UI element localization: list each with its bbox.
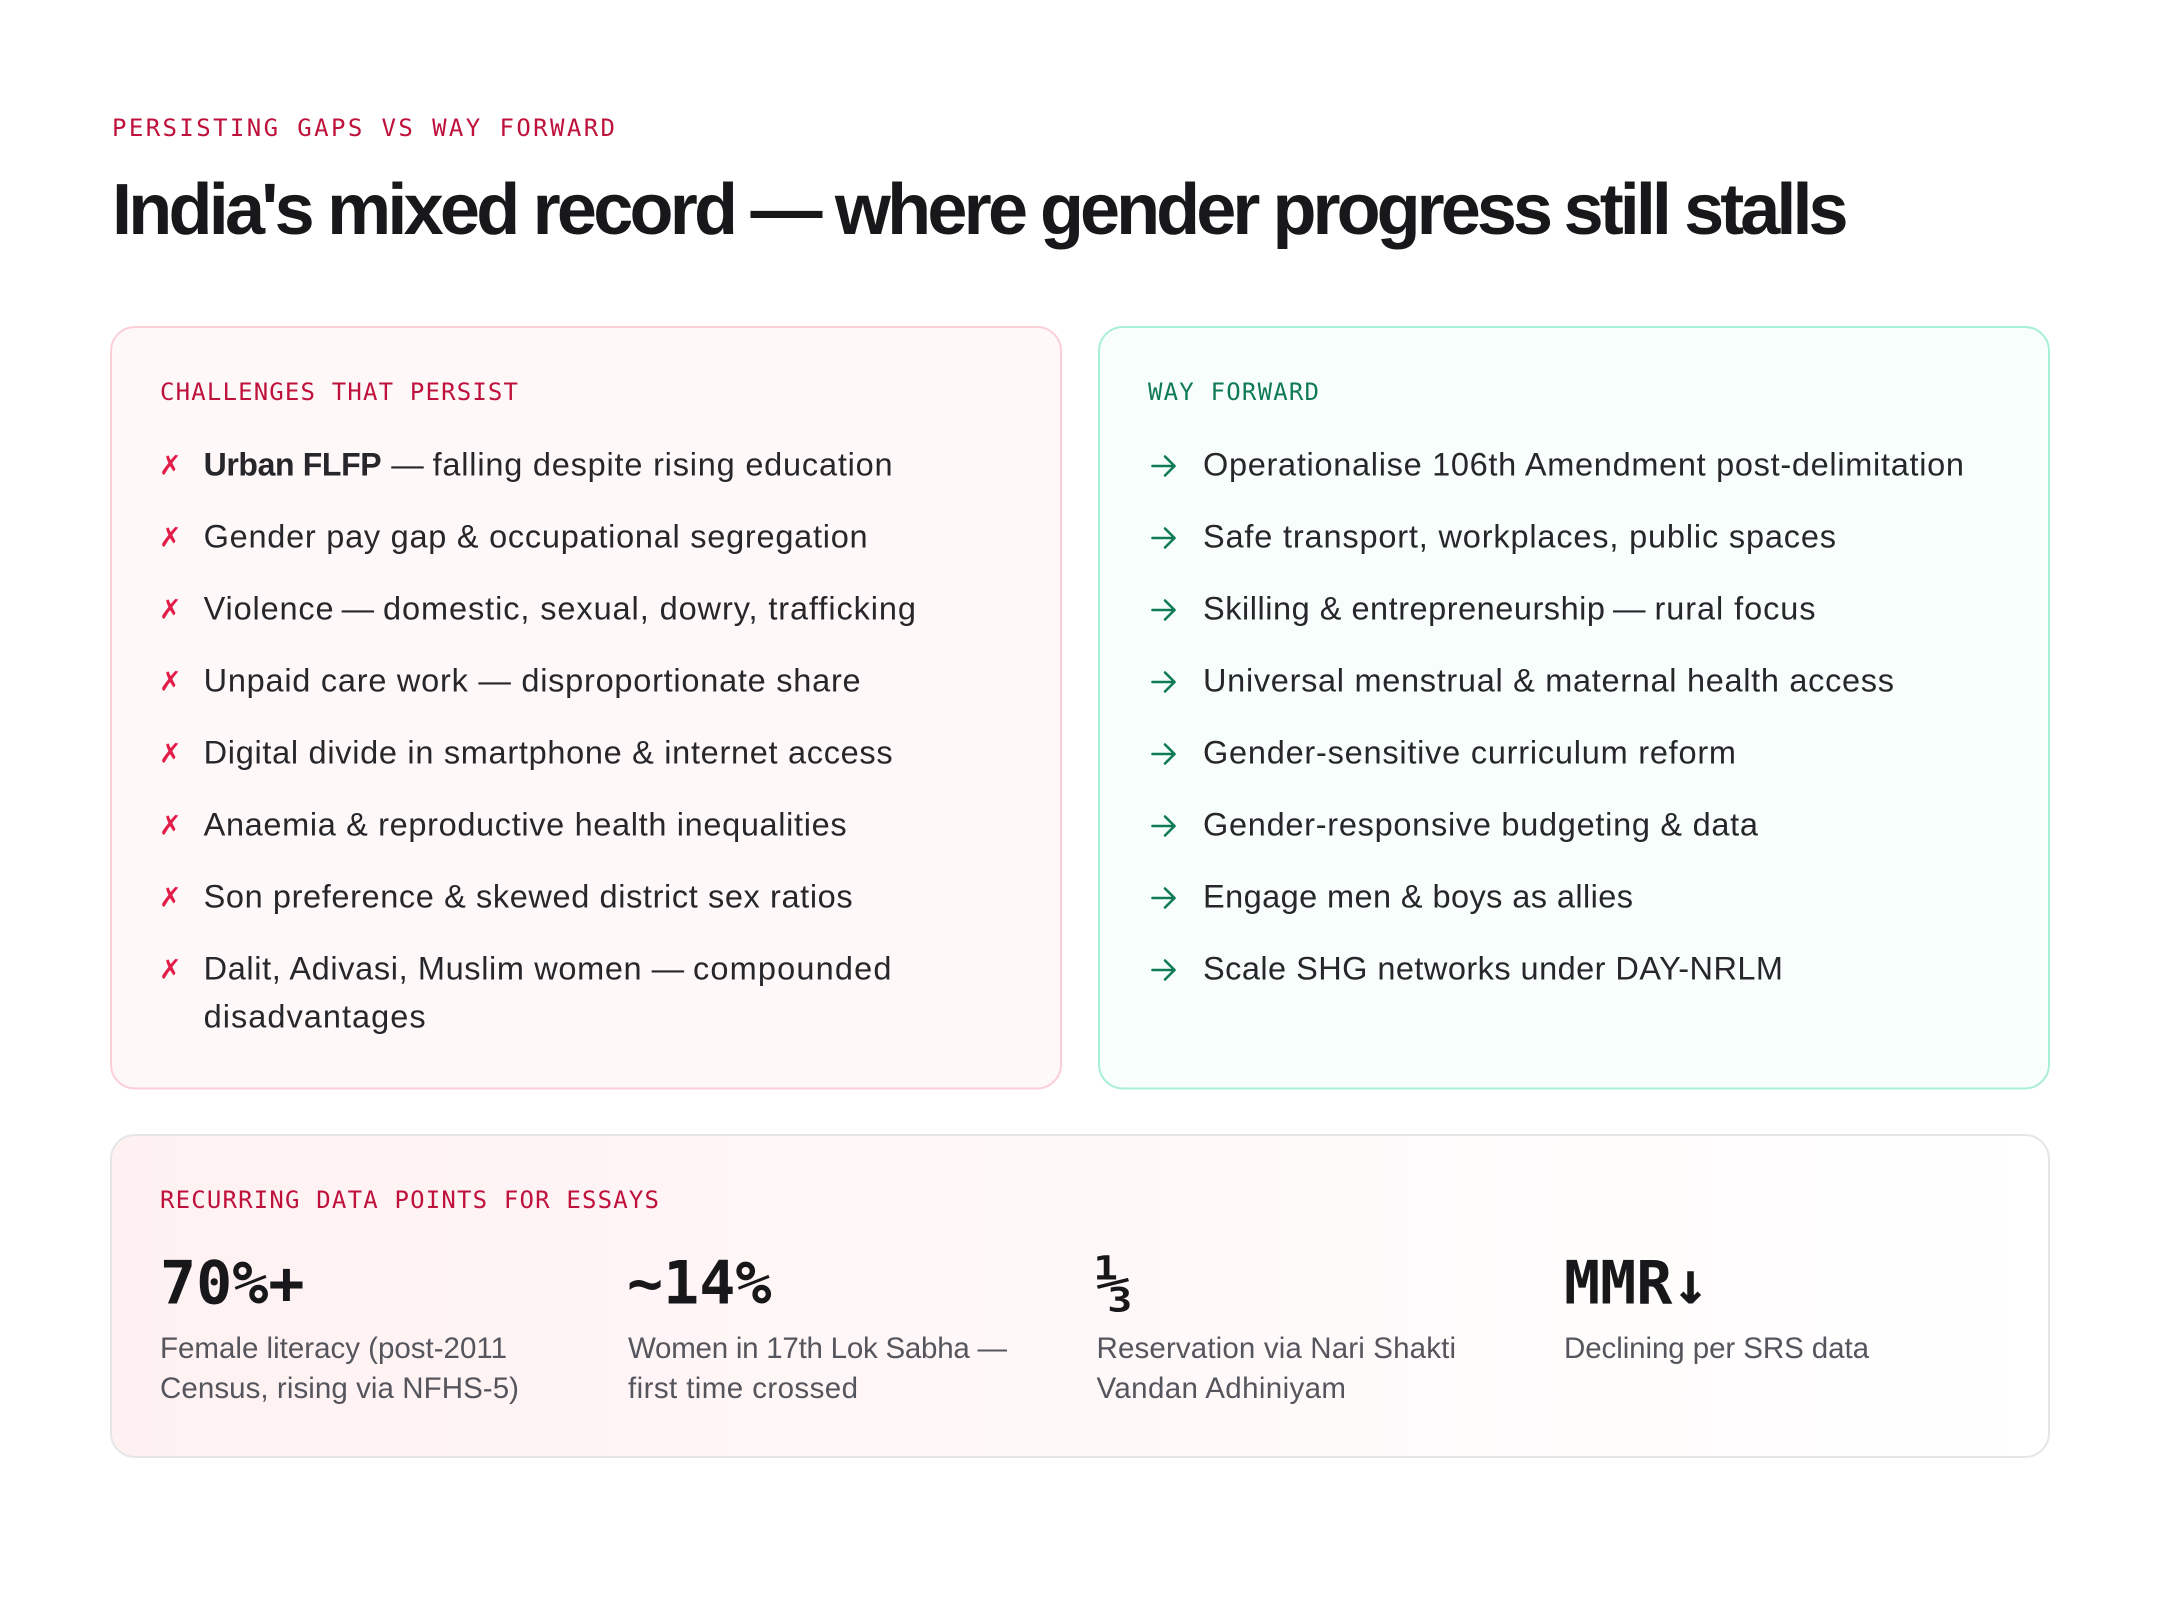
item: son preference: ✗ — [159, 882, 182, 914]
item: skilling: rural focus — [1654, 590, 1816, 626]
stat: lok sabha: Women in 17th Lok Sabha — — [628, 1332, 1008, 1365]
item: health access: Universal menstrual & maternal health access — [1203, 662, 1894, 698]
item: anaemia: ✗ — [159, 810, 182, 842]
item: son preference: Son preference & skewed district sex ratios — [204, 878, 853, 914]
item: urban FLFP: falling despite rising education — [433, 446, 893, 482]
item: urban FLFP: — — [391, 446, 424, 482]
item: unpaid care: Unpaid care work — disproportionate share — [204, 662, 861, 698]
item: compounded disadvantages: ✗ — [159, 954, 182, 986]
item: compounded disadvantages: compounded — [693, 950, 891, 986]
stat: female literacy: Census, rising via NFHS-5) — [160, 1372, 519, 1405]
item: digital divide: Digital divide in smartphone & internet access — [204, 734, 893, 770]
stat: female literacy: 70%+ — [160, 1248, 304, 1318]
panel: challenges that persist — [111, 327, 1061, 1088]
item: digital divide: ✗ — [159, 738, 182, 770]
heading: way forward: WAY FORWARD — [1148, 378, 1319, 406]
eyebrow label: PERSISTING GAPS VS WAY FORWARD — [112, 114, 615, 142]
stat: lok sabha: ~14% — [627, 1248, 772, 1318]
item: pay gap: ✗ — [159, 522, 182, 554]
item: 106th amendment: Operationalise 106th Amendment post-delimitation — [1203, 446, 1964, 482]
item: budgeting: Gender-responsive budgeting & data — [1203, 806, 1759, 842]
item: men and boys: Engage men & boys as allies — [1203, 878, 1633, 914]
item: violence: domestic, sexual, dowry, trafficking — [383, 590, 916, 626]
item: compounded disadvantages: disadvantages — [204, 998, 426, 1034]
title — [112, 170, 1849, 250]
item: violence: Violence — [204, 590, 334, 626]
item: skilling — [1152, 590, 1816, 626]
heading: challenges: CHALLENGES THAT PERSIST — [160, 378, 518, 406]
panel: way forward — [1099, 327, 2049, 1088]
heading: recurring data points: RECURRING DATA POINTS FOR ESSAYS — [160, 1186, 659, 1214]
item: anaemia: Anaemia & reproductive health inequalities — [204, 806, 847, 842]
stat: lok sabha: first time crossed — [628, 1372, 858, 1405]
item: curriculum: Gender-sensitive curriculum reform — [1203, 734, 1736, 770]
stat: lok sabha — [627, 1248, 1008, 1405]
title: gender progress — [1040, 170, 1553, 250]
item: unpaid care: ✗ — [159, 666, 182, 698]
title: India's mixed record — where — [112, 170, 1028, 250]
item: violence: — — [342, 590, 375, 626]
item: compounded disadvantages — [159, 950, 891, 1034]
item: urban FLFP — [159, 446, 893, 482]
item: urban FLFP: Urban FLFP — [204, 446, 382, 482]
item: skilling: — — [1613, 590, 1646, 626]
stat: one third reservation — [1096, 1248, 1456, 1405]
item: safe transport: Safe transport, workplaces, public spaces — [1203, 518, 1836, 554]
title: still stalls — [1564, 170, 1849, 250]
item: SHG networks: Scale SHG networks under DAY-NRLM — [1203, 950, 1783, 986]
stat: one third reservation: Reservation via Nari Shakti — [1096, 1332, 1456, 1365]
item: compounded disadvantages: — — [652, 950, 685, 986]
item: compounded disadvantages: Dalit, Adivasi, Muslim women — [204, 950, 642, 986]
stat: maternal mortality — [1564, 1248, 1870, 1365]
panel: recurring data points — [111, 1135, 2049, 1457]
item: skilling: Skilling & entrepreneurship — [1203, 590, 1605, 626]
stat: maternal mortality: Declining per SRS data — [1564, 1332, 1870, 1365]
item: violence: ✗ — [159, 594, 182, 626]
stat: maternal mortality: MMR↓ — [1564, 1248, 1708, 1318]
stat: female literacy — [160, 1248, 519, 1405]
stat: one third reservation: ⅓ — [1096, 1248, 1132, 1318]
item: urban FLFP: ✗ — [159, 450, 182, 482]
stat: female literacy: Female literacy (post-2011 — [160, 1332, 507, 1365]
item: pay gap: Gender pay gap & occupational segregation — [204, 518, 868, 554]
stat: one third reservation: Vandan Adhiniyam — [1096, 1372, 1346, 1405]
